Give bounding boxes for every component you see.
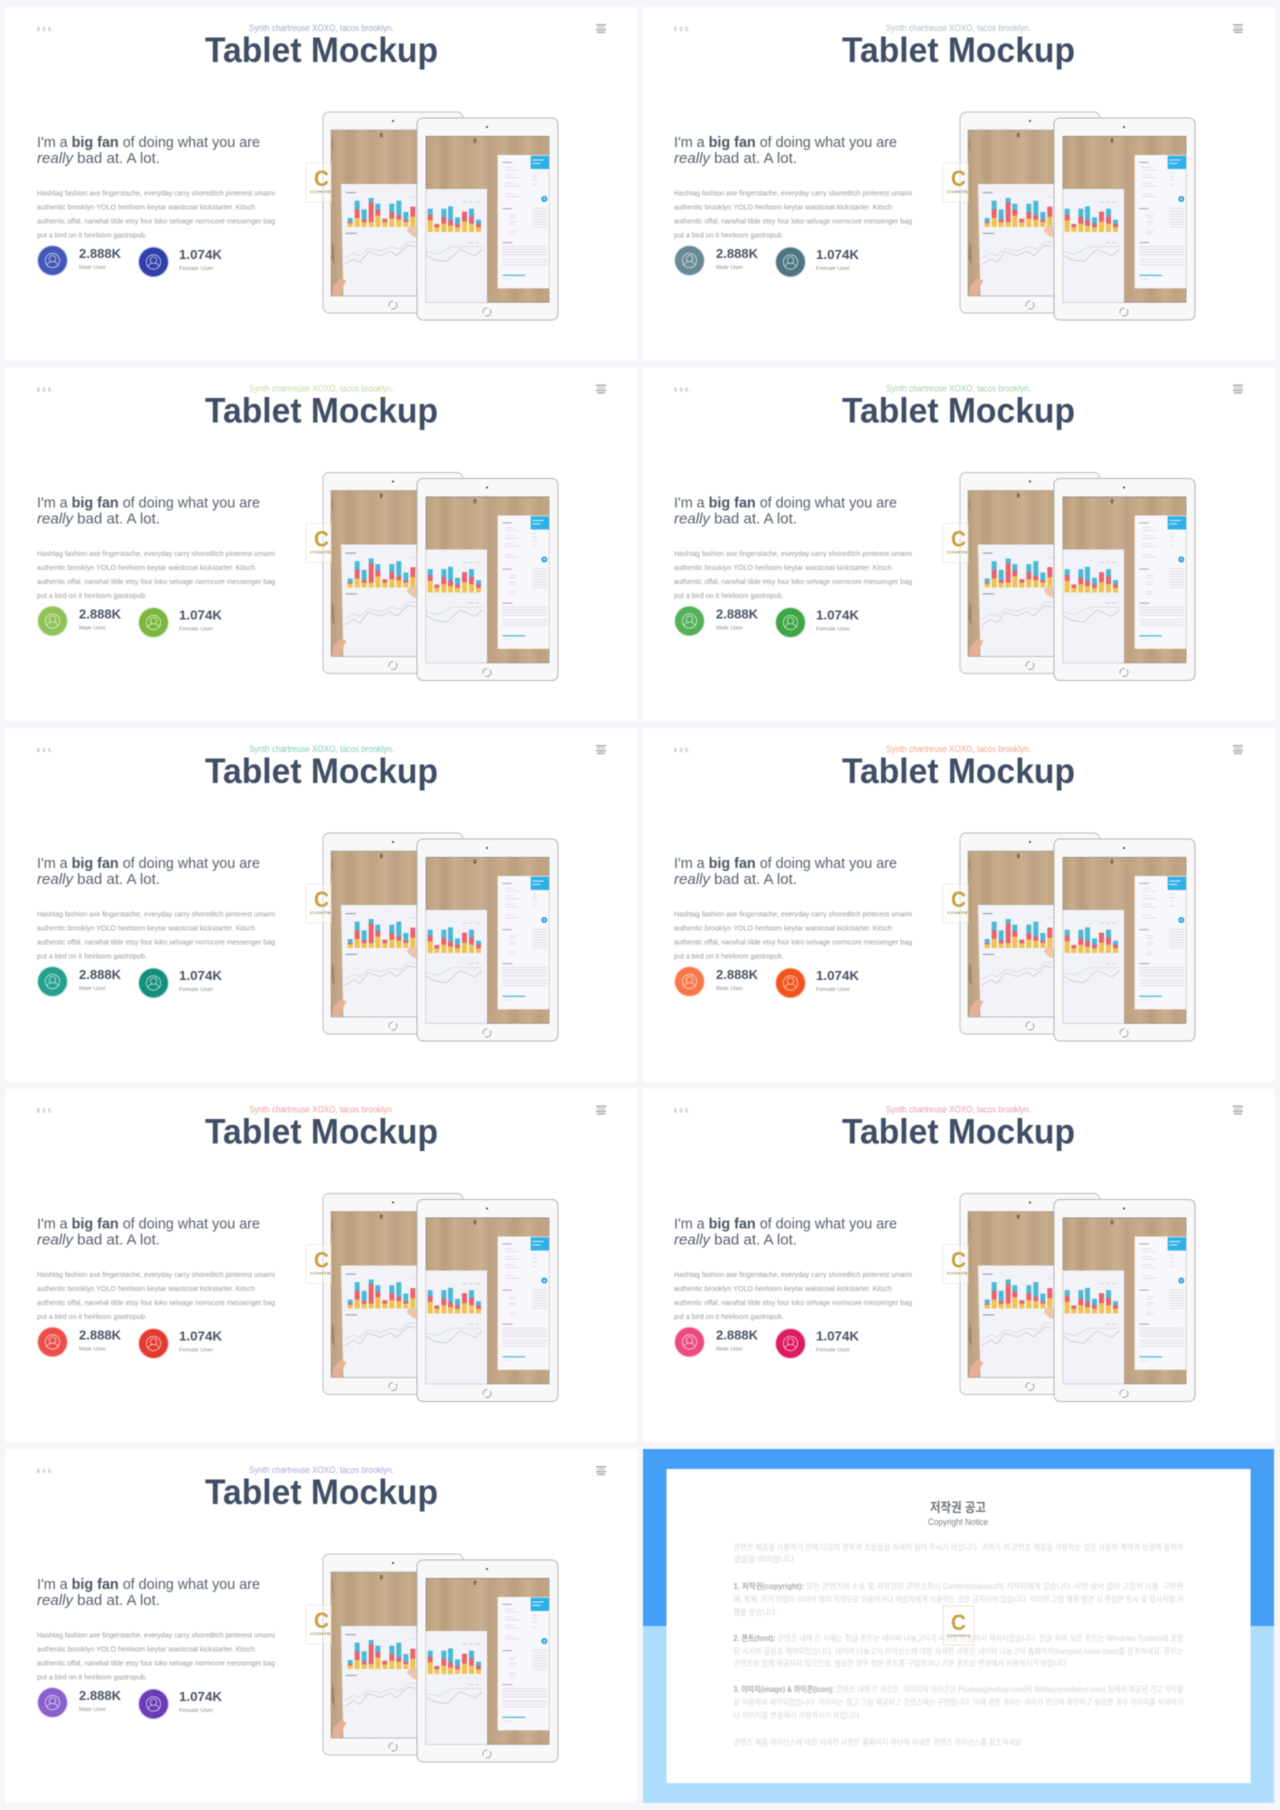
heading: really bad at. A lot. xyxy=(674,151,797,167)
stat: male user: Male User xyxy=(716,265,743,271)
notice body text: 콘텐츠 제품 라이선스에 대한 자세한 사항은 홈페이지 하단에 자세한 콘텐츠 라이선스를 참조하세요. xyxy=(734,1737,1024,1747)
panel: indigo slide xyxy=(6,7,637,361)
heading: I'm a big fan of doing what you are xyxy=(37,856,260,872)
stat: female user: Female User xyxy=(179,1708,213,1714)
body text: Hashtag fashion axe fingerstache, everyday carry shoreditch pinterest umami xyxy=(674,912,912,918)
stat: male user: Male User xyxy=(716,626,743,632)
notice title: 저작권 공고 xyxy=(930,1500,986,1515)
stat: male user xyxy=(674,1326,759,1358)
panel: pink slide xyxy=(643,1088,1274,1442)
body text: authentic offal, narwhal tilde etsy four loko selvage normcore messenger bag xyxy=(37,1660,275,1668)
heading: I'm a big fan of doing what you are xyxy=(37,1216,260,1232)
body text: Hashtag fashion axe fingerstache, everyday carry shoreditch pinterest umami xyxy=(674,190,912,198)
page number: 8 0 5. xyxy=(674,27,690,33)
body text: put a bird on it heirloom gastropub. xyxy=(37,1314,147,1321)
body text: authentic offal, narwhal tilde etsy four loko selvage normcore messenger bag xyxy=(674,218,912,226)
body text: authentic offal, narwhal tilde etsy four loko selvage normcore messenger bag xyxy=(37,218,275,226)
body text: authentic brooklyn YOLO heirloom keytar waistcoat kickstarter. Kitsch xyxy=(37,1646,255,1654)
stat: male user xyxy=(674,966,759,997)
watermark logo: C xyxy=(314,1248,329,1272)
notice subtitle: Copyright Notice xyxy=(928,1517,988,1527)
body text: authentic brooklyn YOLO heirloom keytar waistcoat kickstarter. Kitsch xyxy=(37,1286,255,1293)
panel: teal slide xyxy=(6,728,637,1082)
panel: orange slide xyxy=(643,728,1274,1082)
stat: male user: Male User xyxy=(79,986,106,992)
subtitle: Synth chartreuse XOXO, tacos brooklyn. xyxy=(886,23,1031,34)
title: Tablet Mockup xyxy=(842,1112,1075,1152)
panel: red slide xyxy=(6,1088,637,1442)
heading xyxy=(674,856,897,888)
stat: male user: Male User xyxy=(716,986,743,992)
panel: copyright notice xyxy=(643,1449,1274,1803)
body text xyxy=(674,190,912,240)
icon: menu xyxy=(1233,384,1243,394)
stat: female user: Female User xyxy=(816,987,850,993)
tablets mockup xyxy=(960,112,1195,320)
stat: female user xyxy=(138,968,223,998)
stat: male user: Male User xyxy=(79,1707,106,1713)
tablets mockup xyxy=(323,833,558,1041)
notice body text: 행을 받습니다. xyxy=(734,1607,778,1617)
stat: male user: Male User xyxy=(79,1346,106,1352)
stat: male user xyxy=(37,1326,122,1358)
tablets mockup xyxy=(960,472,1195,680)
icon: menu xyxy=(596,384,606,394)
title: Tablet Mockup xyxy=(842,752,1075,791)
body text: authentic brooklyn YOLO heirloom keytar waistcoat kickstarter. Kitsch xyxy=(674,565,892,572)
stat: female user: 1.074K xyxy=(816,968,860,983)
body text: Hashtag fashion axe fingerstache, everyday carry shoreditch pinterest umami xyxy=(37,1272,275,1279)
body text: authentic brooklyn YOLO heirloom keytar waistcoat kickstarter. Kitsch xyxy=(37,204,255,212)
body text: Hashtag fashion axe fingerstache, everyday carry shoreditch pinterest umami xyxy=(37,190,275,198)
heading xyxy=(674,135,897,167)
stat: male user xyxy=(37,606,122,636)
subtitle: Synth chartreuse XOXO, tacos brooklyn. xyxy=(249,744,394,755)
watermark logo xyxy=(306,524,331,562)
stat: male user: 2.888K xyxy=(716,246,759,261)
stat: female user: Female User xyxy=(816,266,850,272)
page number: 8 0 5. xyxy=(37,1469,53,1475)
body text xyxy=(37,551,275,600)
stat: female user: 1.074K xyxy=(179,1328,223,1344)
stat: female user xyxy=(138,1688,223,1720)
watermark logo: CONTE xyxy=(310,189,331,194)
stat: female user: Female User xyxy=(179,1348,213,1354)
page number: 8 0 5. xyxy=(674,748,690,754)
heading: really bad at. A lot. xyxy=(37,1593,160,1609)
icon: menu xyxy=(596,1466,606,1475)
heading: really bad at. A lot. xyxy=(674,872,797,888)
body text xyxy=(37,1632,275,1682)
page number: 8 0 5. xyxy=(37,748,53,754)
subtitle: Synth chartreuse XOXO, tacos brooklyn. xyxy=(886,384,1031,394)
body text: authentic offal, narwhal tilde etsy four loko selvage normcore messenger bag xyxy=(37,579,275,586)
watermark logo xyxy=(943,1606,974,1645)
watermark logo xyxy=(943,163,968,202)
stat: male user: 2.888K xyxy=(79,1688,122,1703)
body text: authentic offal, narwhal tilde etsy four loko selvage normcore messenger bag xyxy=(37,1300,275,1307)
title: Tablet Mockup xyxy=(205,752,438,791)
heading: really bad at. A lot. xyxy=(674,1232,797,1248)
stat: female user xyxy=(775,1328,860,1359)
stat: female user: Female User xyxy=(179,626,213,632)
watermark logo xyxy=(306,884,331,923)
stat: male user: Male User xyxy=(79,265,106,271)
body text xyxy=(674,912,912,960)
stat: female user xyxy=(138,246,223,278)
subtitle: Synth chartreuse XOXO, tacos brooklyn. xyxy=(886,1104,1031,1116)
title: Tablet Mockup xyxy=(205,392,438,430)
stat: male user xyxy=(37,245,122,276)
body text: authentic brooklyn YOLO heirloom keytar waistcoat kickstarter. Kitsch xyxy=(37,565,255,572)
body text: Hashtag fashion axe fingerstache, everyday carry shoreditch pinterest umami xyxy=(674,1272,912,1279)
title: Tablet Mockup xyxy=(205,31,438,70)
heading xyxy=(37,856,260,888)
notice body text xyxy=(734,1542,1184,1747)
heading xyxy=(37,496,260,528)
stat: female user xyxy=(775,607,860,638)
notice body text: 나 이미지를 변경해서 사용하시기 바랍니다. xyxy=(734,1710,862,1720)
watermark logo: C xyxy=(314,526,329,552)
heading: really bad at. A lot. xyxy=(37,151,160,167)
stat: female user: 1.074K xyxy=(816,247,860,262)
stat: male user: 2.888K xyxy=(79,606,122,622)
body text xyxy=(674,551,912,600)
watermark logo: CONTE xyxy=(310,910,331,915)
body text xyxy=(37,1272,275,1321)
heading: really bad at. A lot. xyxy=(674,512,797,528)
heading: I'm a big fan of doing what you are xyxy=(674,1216,897,1232)
watermark logo: CONTE xyxy=(947,550,968,554)
watermark logo xyxy=(306,163,331,202)
stat: male user: 2.888K xyxy=(716,1328,759,1342)
heading: I'm a big fan of doing what you are xyxy=(37,496,260,512)
body text xyxy=(37,190,275,240)
watermark logo xyxy=(943,524,968,562)
page number: 8 0 5. xyxy=(674,388,690,394)
icon: menu xyxy=(596,1106,606,1115)
body text: authentic brooklyn YOLO heirloom keytar waistcoat kickstarter. Kitsch xyxy=(674,1286,892,1293)
watermark logo: C xyxy=(951,526,966,552)
watermark logo: C xyxy=(314,166,329,191)
notice body text: 콘텐츠 제품을 사용하기 전에 다음의 항목과 조항들을 자세히 읽어 주시기 바랍니다. 귀하가 이 콘텐츠 제품을 사용하는 것은 사용자 계약과 보증에 동의하 xyxy=(734,1542,1184,1552)
watermark logo: CONTE xyxy=(310,550,331,554)
stat: female user: Female User xyxy=(179,987,213,993)
stat: female user: Female User xyxy=(816,626,850,632)
watermark logo: C xyxy=(951,166,966,191)
body text: put a bird on it heirloom gastropub. xyxy=(37,1674,147,1682)
stat: male user xyxy=(674,606,759,636)
heading xyxy=(37,1577,260,1609)
heading: really bad at. A lot. xyxy=(37,872,160,888)
heading: I'm a big fan of doing what you are xyxy=(674,135,897,151)
body text: authentic offal, narwhal tilde etsy four loko selvage normcore messenger bag xyxy=(674,940,912,946)
watermark logo: CONTENTS xyxy=(947,1633,970,1638)
watermark logo xyxy=(943,1244,968,1284)
body text xyxy=(674,1272,912,1321)
stat: male user: Male User xyxy=(716,1346,743,1352)
watermark logo xyxy=(943,884,968,923)
stat: male user: 2.888K xyxy=(79,1328,122,1342)
stat: female user: 1.074K xyxy=(179,247,223,262)
tablets mockup xyxy=(323,112,558,320)
stat: male user xyxy=(674,245,759,276)
title: Tablet Mockup xyxy=(205,1112,438,1152)
tablets mockup xyxy=(323,1194,558,1402)
heading xyxy=(674,496,897,528)
notice body text: 3. 이미지(image) & 아이콘(icon): 콘텐츠 내에 든 사진은, 이미지와 아이콘은 Pixabay(pixabay.com)와 Webalys(webalys.com) 등에서 제공된 기고 저작물 xyxy=(734,1684,1184,1694)
stat: male user: 2.888K xyxy=(79,967,122,982)
body text xyxy=(37,912,275,960)
watermark logo: CONTE xyxy=(310,1270,331,1276)
tablets mockup xyxy=(960,833,1195,1041)
watermark logo: C xyxy=(951,1610,966,1635)
page number: 8 0 5. xyxy=(37,388,53,394)
body text: Hashtag fashion axe fingerstache, everyday carry shoreditch pinterest umami xyxy=(674,551,912,558)
watermark logo: CONTE xyxy=(947,1270,968,1276)
tablets mockup xyxy=(323,1554,558,1762)
subtitle: Synth chartreuse XOXO, tacos brooklyn. xyxy=(249,23,394,34)
heading xyxy=(37,1216,260,1248)
body text: Hashtag fashion axe fingerstache, everyday carry shoreditch pinterest umami xyxy=(37,551,275,558)
body text: authentic brooklyn YOLO heirloom keytar waistcoat kickstarter. Kitsch xyxy=(37,926,255,932)
body text: authentic brooklyn YOLO heirloom keytar waistcoat kickstarter. Kitsch xyxy=(674,204,892,212)
body text: put a bird on it heirloom gastropub. xyxy=(37,232,147,240)
panel: lime slide xyxy=(6,368,637,722)
heading: really bad at. A lot. xyxy=(37,512,160,528)
body text: put a bird on it heirloom gastropub. xyxy=(674,232,784,240)
tablets mockup xyxy=(323,472,558,680)
stat: female user: 1.074K xyxy=(816,608,860,622)
watermark logo: C xyxy=(314,1608,329,1633)
icon: menu xyxy=(1233,1106,1243,1115)
heading xyxy=(674,1216,897,1248)
notice body text: 콘텐츠와 함께 제공되지 않으므로, 필요한 경우 원본 폰트를 구입하거나 기본 폰트로 변경해서 사용하시기 바랍니다. xyxy=(734,1658,1068,1668)
heading xyxy=(37,135,260,167)
stat: female user: 1.074K xyxy=(179,608,223,622)
notice body text: 1. 저작권(copyright): 모든 콘텐츠의 소유 및 저작권은 콘텐츠회사 Contentstokeout의 저작자에게 있습니다. 사전 승낙 없이 고함적 이용, 구한판 xyxy=(734,1581,1184,1591)
body text: put a bird on it heirloom gastropub. xyxy=(37,954,147,960)
page number: 8 0 5. xyxy=(37,27,53,33)
stat: female user: 1.074K xyxy=(179,968,223,983)
body text: authentic offal, narwhal tilde etsy four loko selvage normcore messenger bag xyxy=(37,940,275,946)
stat: female user xyxy=(138,607,223,638)
stat: male user xyxy=(37,1687,122,1718)
stat: female user xyxy=(775,968,860,998)
icon: menu xyxy=(596,745,606,754)
notice body text: 매, 복제, 기기 위험이 되려어 영리 목적으로 이용하거나 제삼자에게 이용하는 것은 금지되어 있습니다. 이러한 고함 행위 발견 시 준엄한 민사 및 형사처벌 사 xyxy=(734,1594,1184,1604)
heading: I'm a big fan of doing what you are xyxy=(37,135,260,151)
stat: female user: Female User xyxy=(816,1348,850,1354)
body text: authentic offal, narwhal tilde etsy four loko selvage normcore messenger bag xyxy=(674,579,912,586)
notice body text: 된 시서와 글꼴로 제작되었습니다. 네이버 나눔고딕 라이선스에 대한 자세한 사항은 네이버 나눔고딕 홈페이지(hangeul.naver.com)를 참조하세요. 폰트는 xyxy=(734,1646,1184,1656)
tablets mockup xyxy=(960,1194,1195,1402)
notice body text: 2. 폰트(font): 콘텐츠 내에 든 서체는 한글 폰트는 네이버 나눔고딕과 서체를 만들어서 제작되었습니다. 한글 외의 모든 폰트는 Windows System에 포함 xyxy=(734,1633,1184,1643)
stat: male user: 2.888K xyxy=(716,606,759,622)
stat: female user: 1.074K xyxy=(179,1689,223,1704)
stat: female user xyxy=(138,1328,223,1359)
stat: male user: 2.888K xyxy=(79,246,122,261)
body text: authentic brooklyn YOLO heirloom keytar waistcoat kickstarter. Kitsch xyxy=(674,926,892,932)
subtitle: Synth chartreuse XOXO, tacos brooklyn. xyxy=(249,1465,394,1476)
body text: put a bird on it heirloom gastropub. xyxy=(674,1314,784,1321)
icon: menu xyxy=(1233,24,1243,33)
page number: 8 0 5. xyxy=(37,1108,53,1114)
watermark logo: C xyxy=(951,887,966,912)
stat: male user xyxy=(37,966,122,997)
panel: green slide xyxy=(643,368,1274,722)
body text: put a bird on it heirloom gastropub. xyxy=(37,593,147,600)
title: Tablet Mockup xyxy=(842,31,1075,70)
stat: male user: 2.888K xyxy=(716,967,759,982)
notice body text: 셨음을 의미합니다. xyxy=(734,1554,796,1564)
watermark logo: CONTE xyxy=(947,910,968,915)
icon: menu xyxy=(1233,745,1243,754)
subtitle: Synth chartreuse XOXO, tacos brooklyn. xyxy=(249,1104,394,1116)
heading: really bad at. A lot. xyxy=(37,1232,160,1248)
subtitle: Synth chartreuse XOXO, tacos brooklyn. xyxy=(886,744,1031,755)
watermark logo: C xyxy=(314,887,329,912)
panel: slate slide xyxy=(643,7,1274,361)
heading: I'm a big fan of doing what you are xyxy=(37,1577,260,1593)
icon: menu xyxy=(596,24,606,33)
body text: authentic offal, narwhal tilde etsy four loko selvage normcore messenger bag xyxy=(674,1300,912,1307)
notice body text: 을 이용하여 제작되었습니다. 이미지는 참고 그림 제공되고 콘텐츠에는 구현합니다. 이에 관한 권리는 귀하가 받으며 확인하고 필요한 경우 이미지를 삭제하거 xyxy=(734,1697,1184,1707)
body text: Hashtag fashion axe fingerstache, everyday carry shoreditch pinterest umami xyxy=(37,912,275,918)
stat: female user xyxy=(775,246,860,278)
stat: female user: Female User xyxy=(179,266,213,272)
heading: I'm a big fan of doing what you are xyxy=(674,856,897,872)
stat: male user: Male User xyxy=(79,626,106,632)
watermark logo: CONTE xyxy=(947,189,968,194)
title: Tablet Mockup xyxy=(205,1473,438,1512)
stat: female user: 1.074K xyxy=(816,1328,860,1344)
title: Tablet Mockup xyxy=(842,392,1075,430)
body text: Hashtag fashion axe fingerstache, everyday carry shoreditch pinterest umami xyxy=(37,1632,275,1640)
watermark logo: CONTE xyxy=(310,1631,331,1636)
watermark logo: C xyxy=(951,1248,966,1272)
page number: 8 0 5. xyxy=(674,1108,690,1114)
heading: I'm a big fan of doing what you are xyxy=(674,496,897,512)
subtitle: Synth chartreuse XOXO, tacos brooklyn. xyxy=(249,384,394,394)
watermark logo xyxy=(306,1244,331,1284)
watermark logo xyxy=(306,1605,331,1644)
body text: put a bird on it heirloom gastropub. xyxy=(674,954,784,960)
body text: put a bird on it heirloom gastropub. xyxy=(674,593,784,600)
panel: purple slide xyxy=(6,1449,637,1803)
